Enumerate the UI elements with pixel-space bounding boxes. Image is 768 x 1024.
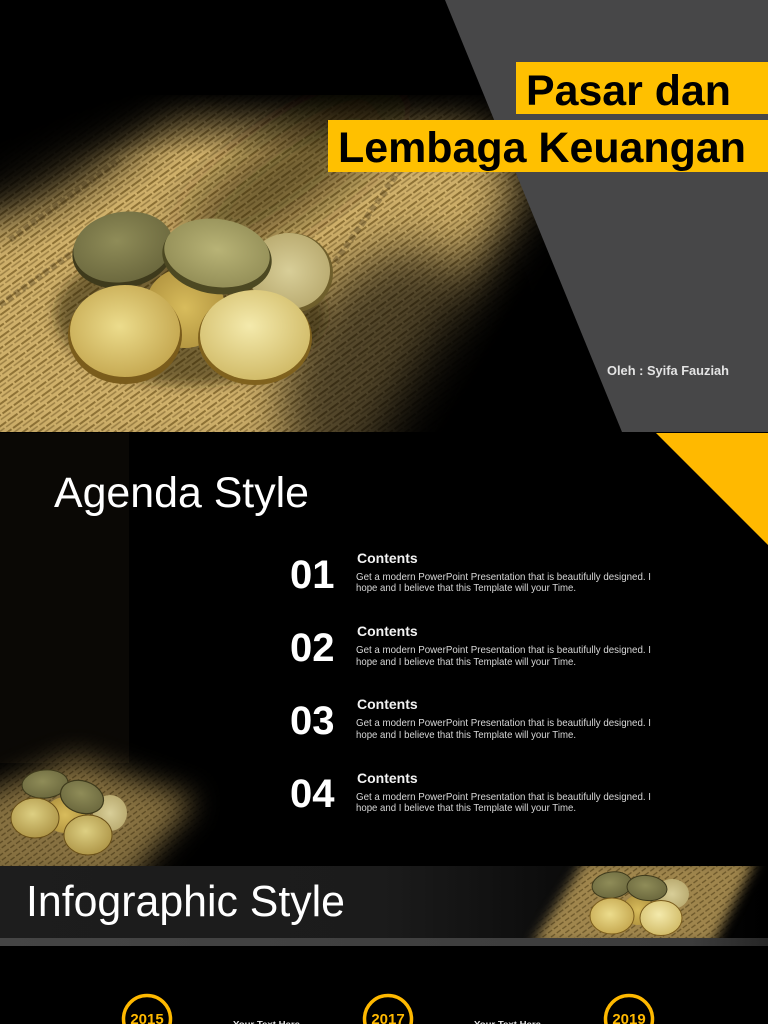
heading: Agenda Style [54, 469, 309, 517]
small coin: bottom left [11, 798, 59, 838]
agenda item 02 [290, 623, 651, 670]
agenda item 03: Get a modern PowerPoint Presentation that is beautifully designed. I [356, 717, 651, 729]
photo: small coins [0, 742, 206, 866]
agenda item 01: Contents [357, 550, 418, 566]
coin: back right [248, 233, 333, 313]
agenda item 03: hope and I believe that this Template will your Time. [356, 729, 576, 741]
agenda item 02: Get a modern PowerPoint Presentation that is beautifully designed. I [356, 644, 651, 656]
heading: Infographic Style [26, 877, 345, 926]
panel: agenda slide [0, 433, 768, 866]
coin: bottom right [198, 290, 312, 385]
small coin: top middle [56, 775, 108, 819]
coin: top left [66, 204, 180, 296]
agenda item 02: hope and I believe that this Template will your Time. [356, 656, 576, 668]
agenda item 04: Get a modern PowerPoint Presentation that is beautifully designed. I [356, 791, 651, 803]
small coin: top left [21, 768, 69, 800]
header band [0, 866, 768, 938]
agenda item 03: Contents [357, 696, 418, 712]
panel: title slide [0, 0, 768, 432]
agenda item 04: Contents [357, 770, 418, 786]
agenda item 04 [290, 770, 651, 816]
strip coin: right [655, 879, 689, 909]
agenda item 01: hope and I believe that this Template will your Time. [356, 582, 576, 594]
strip coin: middle [623, 895, 653, 925]
title box: Lembaga Keuangan: Lembaga Keuangan [338, 124, 746, 172]
timeline marker 2019 [606, 996, 652, 1024]
grey diagonal panel [445, 0, 768, 432]
small coin: middle [45, 797, 85, 833]
coin: back middle [145, 268, 225, 348]
agenda item 04: 04 [290, 772, 335, 816]
agenda item 02: Contents [357, 623, 418, 639]
coin: top middle [157, 212, 277, 301]
agenda item 01 [290, 550, 651, 597]
small coin: bottom [64, 815, 112, 855]
header underline bar [0, 938, 768, 946]
left tint [0, 433, 129, 763]
small coin: right [93, 795, 127, 831]
shadow under coins [55, 245, 325, 385]
timeline marker 2017 [364, 996, 412, 1024]
agenda item 04: hope and I believe that this Template will your Time. [356, 802, 576, 814]
coin: bottom left [68, 285, 182, 384]
strip coin: top middle [626, 873, 668, 903]
title box: Pasar dan: Pasar dan [526, 67, 731, 115]
agenda item 02: 02 [290, 626, 334, 670]
strip coin: top left [590, 869, 634, 901]
strip coin: bottom [640, 900, 682, 936]
author: Oleh : Syifa Fauziah [607, 363, 729, 378]
agenda item 01: 01 [290, 553, 334, 597]
agenda item 03: 03 [290, 699, 334, 743]
strip coin: bottom left [590, 898, 634, 934]
slide background [0, 433, 768, 866]
panel: infographic slide [0, 866, 768, 1024]
agenda item 01: Get a modern PowerPoint Presentation that is beautifully designed. I [356, 571, 651, 583]
photo: coins on newspaper [0, 95, 540, 432]
agenda item 03 [290, 696, 651, 743]
timeline marker 2015 [124, 996, 170, 1024]
header photo: coins [528, 866, 762, 938]
yellow corner triangle [656, 433, 768, 545]
